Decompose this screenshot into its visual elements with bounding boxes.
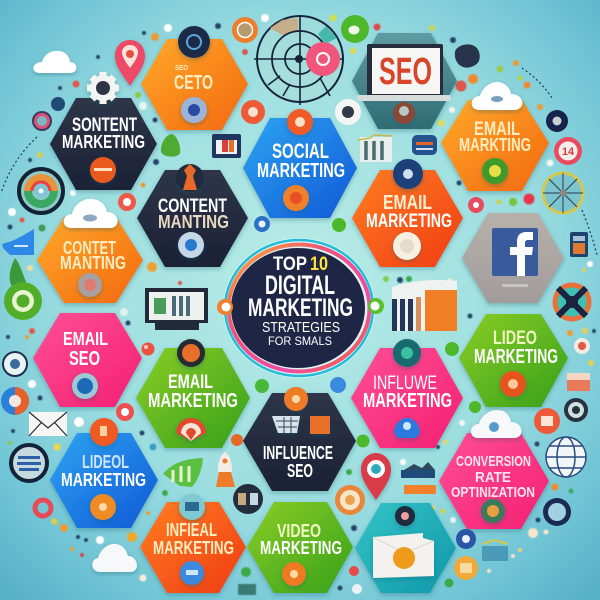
label: social marketing: SOCIAL: [272, 140, 329, 163]
label: content manting: [158, 196, 229, 232]
icon: monitor with bars: [145, 288, 208, 330]
label: lideo marketing: MARKETING: [474, 346, 558, 368]
icon: laptop with SEO: SEO: [379, 51, 432, 93]
icon: green leaf chart: [163, 458, 203, 487]
label: video marketing: MARKETING: [260, 538, 342, 558]
icon: dark circle book: [233, 484, 263, 514]
icon: pink burst: [306, 42, 340, 76]
icon: influwe top circle: [393, 339, 421, 367]
icon: coral ring: [35, 500, 51, 516]
label: influwe marketing: INFLUWE: [373, 373, 437, 394]
label: email marketing red: EMAIL: [383, 192, 432, 214]
icon: seo bottom circle: [393, 102, 415, 124]
label: conversion rate optimization: [451, 453, 535, 501]
icon: contet bottom circle: [78, 273, 102, 297]
icon: content marketing circle: [90, 157, 116, 183]
icon: lideo bottom circle: [500, 371, 526, 397]
icon: top-left map pin: [115, 40, 145, 86]
title text: MARKETING: [248, 294, 353, 322]
hexagon: email marketing (red-orange): [352, 170, 463, 267]
icon: ceto bottom circle: [181, 97, 207, 123]
icon: dark blob: [455, 44, 480, 68]
icon: window tile: [212, 134, 241, 158]
label: email marketing orange: EMAIL: [474, 119, 520, 140]
hexagon: lideol marketing (blue): [50, 433, 158, 528]
icon: green ball: [469, 401, 481, 413]
label: infieal marketing: INFIEAL: [166, 520, 217, 540]
label: ceto: CETO: [174, 72, 213, 94]
icon: colour wheel: [555, 285, 589, 319]
icon: orange dot: [231, 434, 243, 446]
icon: influwe bottom badge: [394, 418, 420, 438]
title text: STRATEGIES: [262, 319, 340, 336]
dotted arcs: [1, 68, 597, 255]
label: contet manting: [60, 238, 126, 273]
label: influwe marketing: [363, 373, 452, 412]
label: sontent marketing: MARKETING: [62, 132, 145, 152]
icon: radar target: [254, 16, 343, 105]
icon: coral calendar ring: [554, 137, 582, 165]
label: ceto: [174, 65, 213, 94]
icon: navy ring: [543, 498, 571, 526]
icon: coral ring dot: [118, 193, 136, 211]
label: influence seo: INFLUENCE: [263, 443, 333, 463]
icon: list circle: [11, 445, 47, 481]
icon: green ball: [445, 342, 459, 356]
hexagon: video marketing (green): [247, 502, 353, 593]
icon: small ring target: [32, 111, 52, 131]
icon: shop tile: [567, 373, 590, 391]
label: email seo: SEO: [69, 348, 100, 370]
hexagon: envelope (cyan): [355, 503, 456, 593]
icon: blue ball: [330, 377, 346, 393]
hexagon: contet manting (orange): [37, 217, 143, 303]
icon: social top circle: [287, 109, 313, 135]
icon: small navy circle: [51, 97, 65, 111]
icon: cloud on email hexagon: [472, 82, 522, 110]
label: email seo: [63, 329, 108, 370]
hexagon: content marketing (black): [50, 98, 157, 190]
label: content manting: MANTING: [158, 212, 229, 232]
label: email marketing red: MARKETING: [366, 211, 452, 232]
icon: left coral dot: [142, 342, 154, 356]
icon: cloud on conversion hexagon: [471, 410, 522, 438]
icon: device badge: [570, 232, 588, 257]
label: influence seo: SEO: [287, 461, 313, 481]
icon: coral white dot: [116, 403, 134, 421]
icon: striped bar chart: [392, 280, 457, 331]
icon: navy ring small: [3, 352, 27, 376]
icon: email red bottom circle: [393, 232, 421, 260]
label: lideo marketing: [474, 328, 558, 368]
icon: gear: [87, 72, 119, 104]
icon: bar chart tile: [358, 135, 392, 162]
icon: infieal top circle: [179, 494, 205, 520]
icon: laptop with SEO: [357, 44, 451, 101]
label: sontent marketing: SONTENT: [72, 115, 137, 136]
label: email marketing orange: [459, 119, 531, 155]
label: influwe marketing: MARKETING: [363, 390, 452, 412]
icon: orange ring top: [232, 17, 258, 43]
hexagon: seo (teal): [352, 33, 457, 129]
icon: second map pin: [361, 453, 391, 500]
label: influence seo: [263, 443, 333, 481]
icon: ceto top circle: [178, 26, 210, 58]
label: email marketing green: MARKETING: [148, 390, 238, 412]
icon: envelope with orange dot: [373, 533, 434, 578]
label: email marketing green: EMAIL: [168, 372, 213, 393]
label: contet manting: CONTET: [63, 238, 116, 258]
icon: white envelope: [29, 412, 67, 436]
icon: email green top circle: [177, 339, 205, 367]
icon: navy disc: [546, 110, 568, 132]
hexagon: email marketing (green): [136, 348, 250, 448]
label: social marketing: [257, 140, 345, 182]
label: video marketing: VIDEO: [277, 521, 321, 541]
label: contet manting: MANTING: [60, 253, 126, 273]
icon: donut gauge: [19, 169, 63, 213]
label: conversion rate optimization: CONVERSION: [456, 453, 531, 470]
icon: compass wheel: [543, 173, 583, 213]
title text: FOR SMALS: [268, 334, 332, 348]
hexagon: facebook (grey): [462, 213, 564, 303]
icon: green top circle: [341, 15, 369, 43]
hexagon: influwe marketing (pink): [351, 348, 463, 448]
icon: conversion bottom circle: [481, 499, 505, 523]
icon: influence top circle: [284, 387, 308, 411]
icon: green blob: [161, 134, 180, 157]
icon: lideol top circle: [90, 418, 118, 446]
hexagon: social marketing (blue): [243, 118, 357, 218]
label: conversion rate optimization: RATE: [475, 469, 511, 486]
icon: white dot: [352, 584, 362, 594]
label: conversion rate optimization: OPTINIZATION: [451, 484, 535, 501]
icon: green dot: [444, 578, 454, 588]
icon: coral circle: [241, 100, 265, 124]
label: lideo marketing: LIDEO: [493, 328, 537, 349]
icon: envelope top circle: [395, 506, 415, 526]
icon: orange bar: [404, 485, 436, 494]
icon: green dot: [255, 379, 269, 393]
hexagon: email seo (pink): [33, 313, 142, 407]
icon: ring left node: [217, 299, 233, 315]
label: content manting: CONTENT: [158, 196, 227, 217]
icon: blue speech shape: [2, 229, 34, 255]
hexagon: email marketing (orange): [441, 100, 549, 191]
hexagon labels: [60, 65, 558, 558]
icon: top-left cloud: [33, 51, 76, 73]
label: email seo: EMAIL: [63, 329, 108, 349]
icon: circles on hexagons: [72, 26, 526, 586]
label: email marketing orange: MARKTING: [459, 135, 531, 155]
icon: email seo circle: [72, 373, 98, 399]
label: lideol marketing: LIDEOL: [82, 452, 129, 472]
icon: email marketing bottom circle: [482, 158, 508, 184]
label: infieal marketing: [153, 520, 234, 558]
icon: orange ring: [335, 485, 365, 515]
label: lideol marketing: MARKETING: [61, 470, 146, 490]
icon: beige orange circle: [454, 556, 478, 580]
hexagon: influence seo (black): [243, 393, 356, 491]
hexagon: infieal marketing (red-orange): [140, 502, 246, 593]
label: social marketing: MARKETING: [257, 160, 345, 182]
icon: content manting bottom circle: [178, 232, 204, 258]
icon: infieal bottom circle: [180, 561, 204, 585]
icon: rocket cone: [216, 452, 235, 487]
icon: coral square circle: [534, 408, 560, 434]
hexagon: content manting (black): [137, 170, 248, 267]
icon: globe: [546, 437, 586, 477]
icon: green ball: [332, 218, 346, 232]
title text: [248, 254, 353, 348]
icon: bottom-left cloud: [92, 544, 137, 572]
icon: blue circle bird: [456, 529, 476, 549]
icon: social bottom circle: [283, 185, 309, 211]
label: email marketing red: [366, 192, 452, 232]
icon: facebook: [492, 228, 538, 287]
label: sontent marketing: [62, 115, 145, 152]
icon: lideol bottom circle: [90, 494, 116, 520]
label: lideol marketing: [61, 452, 146, 490]
icon: red dot: [349, 566, 359, 576]
title text: TOP: [273, 254, 307, 275]
central title badge: [223, 238, 375, 378]
icon: email red top circle: [393, 159, 423, 189]
hexagon: lideo marketing (green): [459, 314, 568, 407]
label: infieal marketing: MARKETING: [153, 538, 234, 558]
hexagon: ceto (orange): [141, 39, 248, 130]
icon: blue orange circle: [1, 387, 29, 415]
icon: flat dark banner: [401, 462, 435, 478]
icon: white circle photo: [335, 99, 361, 125]
label: video marketing: [260, 521, 342, 558]
icon: blue ring dot: [254, 216, 270, 232]
icon: white dot: [74, 417, 84, 427]
icon: cart and tile: [272, 416, 330, 434]
title text: 10: [310, 254, 328, 275]
icon: round red badge: [574, 338, 590, 354]
icon: dark ring: [564, 398, 588, 422]
hexagon: conversion rate optimization (pink): [439, 433, 549, 529]
icon: navy chip: [412, 135, 437, 155]
icon: green ball: [356, 434, 370, 448]
icon: coral calendar ring: 14: [562, 146, 575, 158]
label: ceto: SEO: [175, 65, 188, 72]
label: email marketing green: [148, 372, 238, 412]
icon: ring right node: [368, 298, 384, 314]
icon: video bottom circle: [282, 562, 306, 586]
icon: cloud on content hexagon: [64, 199, 118, 228]
title text: DIGITAL: [265, 270, 335, 300]
icon: marker badge on black hexagon: [176, 164, 204, 192]
icon: green chat with leaf: [4, 258, 42, 320]
icon: mini bar chart: [482, 540, 508, 561]
icon: coral dot ring: [468, 197, 484, 213]
icon: email green wifi circle: [176, 418, 206, 441]
